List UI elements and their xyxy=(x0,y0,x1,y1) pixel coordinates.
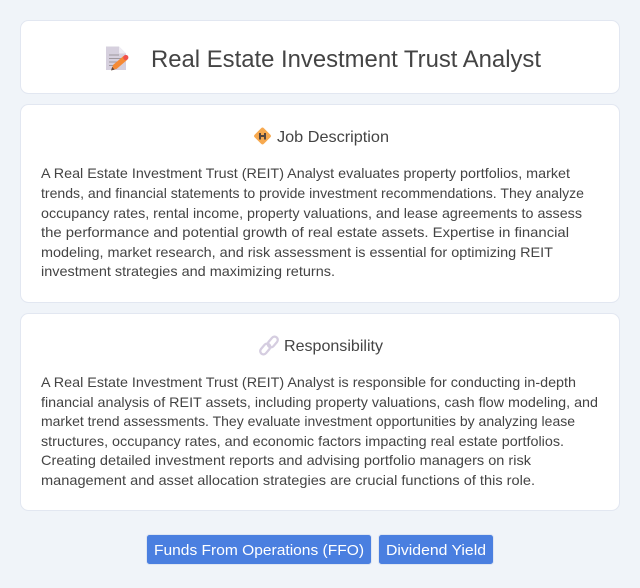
responsibility text: management and asset allocation strategies are crucial functions of this role. xyxy=(41,472,535,488)
responsibility text: market trend assessments. They evaluate investment opportunities by analyzing lease xyxy=(41,413,575,429)
panel: responsibility xyxy=(20,314,620,510)
icon: diamond sign xyxy=(253,127,272,145)
job description text: modeling, market research, and risk assessment is essential for optimizing REIT xyxy=(41,244,553,260)
tag: dividend yield xyxy=(378,534,494,564)
tag: funds from operations: Funds From Operations (FFO) xyxy=(154,543,364,559)
heading: responsibility: Responsibility xyxy=(284,338,383,355)
tag: dividend yield: Dividend Yield xyxy=(386,543,486,559)
job description text xyxy=(41,165,584,279)
responsibility text: A Real Estate Investment Trust (REIT) Analyst is responsible for conducting in-depth xyxy=(41,374,576,390)
job description text: the performance and potential growth of real estate assets. Expertise in financial xyxy=(41,224,569,240)
panel: title header xyxy=(20,20,620,94)
icon: link xyxy=(259,335,279,356)
responsibility text: Creating detailed investment reports and advising portfolio managers on risk xyxy=(41,452,532,468)
job description text: trends, and financial statements to provide investment recommendations. They analyze xyxy=(41,185,584,201)
panel: job description xyxy=(20,104,620,302)
responsibility text: financial analysis of REIT assets, including property valuations, cash flow modeling, and xyxy=(41,394,598,410)
tag: funds from operations xyxy=(146,534,372,564)
job description text: A Real Estate Investment Trust (REIT) Analyst evaluates property portfolios, market xyxy=(41,165,570,181)
job description text: investment strategies and maximizing returns. xyxy=(41,263,335,279)
job description text: occupancy rates, rental income, property valuations, and lease agreements to assess xyxy=(41,205,582,221)
responsibility text xyxy=(41,374,598,488)
heading: job description: Job Description xyxy=(277,129,389,146)
responsibility text: structures, occupancy rates, and economic factors impacting real estate portfolios. xyxy=(41,433,564,449)
icon: document with pencil xyxy=(106,46,128,70)
title: Real Estate Investment Trust Analyst xyxy=(151,46,541,73)
